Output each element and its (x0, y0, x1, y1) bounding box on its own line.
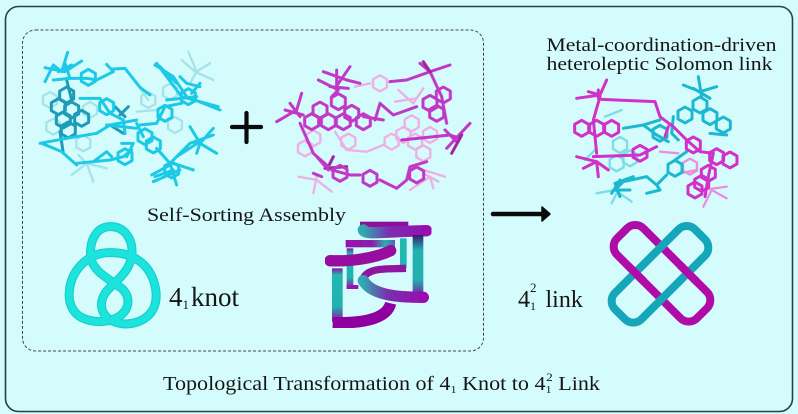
label: 4_1 knot: 4 (169, 282, 182, 312)
icon: 4_1^2 Solomon link (607, 220, 715, 327)
label: 4_1 knot: knot (191, 282, 240, 312)
label: Metal-coordination-driven heteroleptic Solomon link (546, 36, 776, 75)
arrow: reaction direction (493, 207, 550, 221)
caption: Topological Transformation: 1 (546, 384, 552, 396)
molecule: cyan 4_1 knot structure (40, 52, 220, 185)
label: Metal-coordination-driven heteroleptic Solomon link: Metal-coordination-driven (546, 36, 776, 56)
caption: Topological Transformation: Knot to 4 (457, 373, 546, 395)
label: Metal-coordination-driven heteroleptic Solomon link: heteroleptic Solomon link (546, 55, 773, 75)
label: 4_1^2 link: 1 (530, 299, 536, 313)
caption: Topological Transformation: Link (553, 373, 600, 395)
plus sign (232, 113, 261, 142)
icon: 4_1 knot (69, 227, 156, 324)
caption: Topological Transformation: 1 (450, 384, 457, 396)
label: 4_1 knot: 1 (182, 297, 189, 312)
label: 4_1^2 link: 4 (518, 287, 530, 313)
molecule: heteroleptic Solomon link structure (575, 77, 737, 207)
label: 4_1^2 link: 2 (530, 280, 536, 295)
label: Self-Sorting Assembly: Self-Sorting Assembly (147, 205, 347, 226)
dashed panel: self-sorting assembly (22, 30, 484, 351)
molecule: magenta knot structure (277, 62, 470, 193)
icon: 3D knot tangle (330, 222, 427, 323)
label: 4_1^2 link: link (546, 287, 583, 313)
caption: Topological Transformation: Topological Transformation of 4 (163, 373, 423, 395)
caption: Topological Transformation: 2 (546, 370, 553, 384)
